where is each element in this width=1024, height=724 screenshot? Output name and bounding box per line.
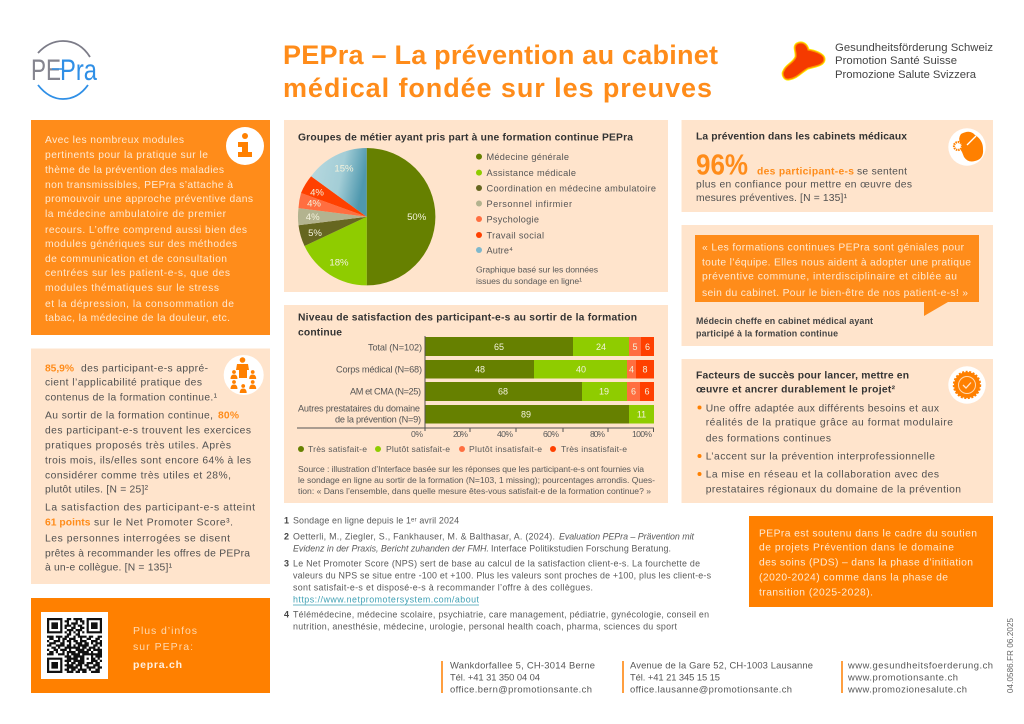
row: Total xyxy=(425,337,654,356)
bar legend: Plutôt satisfait-e xyxy=(386,444,450,454)
bar chart source: le sondage en ligne au sortir de la formation (N=103, 1 missing); pourcentages arrondis. Ques- xyxy=(298,475,655,485)
bar category labels xyxy=(298,342,422,424)
panel: professional groups pie chart xyxy=(284,120,668,292)
quote text: toute l’équipe. Elles nous aident à adopter une pratique xyxy=(702,258,971,268)
bullet list: L’accent sur la prévention interprofessionnelle xyxy=(706,452,935,462)
panel: satisfaction bar chart xyxy=(284,305,668,503)
quote text: préventive commune, interdisciplinaire et ciblée au xyxy=(702,272,957,282)
logo: PEPra xyxy=(31,41,97,99)
pie legend: Travail social xyxy=(486,230,544,240)
address: Bern: office.bern@promotionsante.ch xyxy=(450,684,592,694)
address: Bern: Wankdorfallee 5, CH-3014 Berne xyxy=(450,660,595,670)
intro text: pertinents pour la pratique sur le xyxy=(45,150,208,161)
intro text: centrées sur les patient-e-s, que des xyxy=(45,268,230,279)
bullet list: La mise en réseau et la collaboration avec des xyxy=(706,470,939,480)
panel: success factors xyxy=(682,359,993,503)
key figures text: considérer comme très utiles et 28%, xyxy=(45,470,231,482)
key figures text: trois mois, ils/elles sont encore 64% à les xyxy=(45,456,251,466)
heading: bar chart: Niveau de satisfaction des participant-e-s au sortir de la formation xyxy=(298,312,637,324)
logo: PEPra: PE xyxy=(31,54,61,87)
title: médical fondée sur les preuves xyxy=(283,73,712,103)
document reference: 04.0586.FR 06.2025 xyxy=(1006,617,1015,693)
speech bubble xyxy=(695,235,979,316)
row: Total: 24 xyxy=(596,342,606,352)
funding text: des soins (PDS) – dans la phase d’initiation xyxy=(759,558,973,568)
intro text: la médecine ambulatoire de premier xyxy=(45,209,227,220)
stat description xyxy=(696,166,912,204)
footnotes: 2 xyxy=(284,532,289,542)
stat description: des participant-e-s xyxy=(757,166,854,178)
heading: success factors: Facteurs de succès pour lancer, mettre en xyxy=(696,370,909,382)
row: Autres prestataires xyxy=(425,405,654,424)
logo: Gesundheitsförderung Schweiz: Promozione Salute Svizzera xyxy=(835,69,977,81)
footnotes: sont satisfait-e-s et disposé-e-s à recommander l’offre à des collègues. xyxy=(293,582,593,592)
intro text: thème de la prévention des maladies xyxy=(45,165,224,176)
footnotes: 3 xyxy=(284,558,289,568)
footnotes: https://www.netpromotersystem.com/about xyxy=(293,594,480,604)
bar category labels: AM et CMA (N=25) xyxy=(350,386,421,396)
logo: Gesundheitsförderung Schweiz: Promotion Santé Suisse xyxy=(835,55,957,67)
row: Total: 5 xyxy=(632,342,638,352)
footnotes: Télémédecine, médecine scolaire, psychiatrie, care management, pédiatrie, gynécologie, conseil en xyxy=(293,610,709,620)
key figures text: des participant-e-s appré- xyxy=(81,364,208,374)
pie chart: 4% xyxy=(307,198,321,210)
row: Corps médical: 8 xyxy=(642,364,648,374)
address: Lausanne: Tél. +41 21 345 15 15 xyxy=(630,672,720,682)
footnotes: 4 xyxy=(284,610,289,620)
key figures text: La satisfaction des participant-e-s atteint xyxy=(45,502,255,514)
intro text: de communication et de consultation xyxy=(45,254,227,265)
row: Autres prestataires: 11 xyxy=(637,410,646,420)
panel: testimonial xyxy=(682,225,993,346)
bar axis labels xyxy=(411,429,652,439)
stat: 96%: 96% xyxy=(696,150,748,182)
stacked bar chart xyxy=(297,336,654,432)
bar axis labels: 0% xyxy=(411,429,423,439)
key figures text: Au sortir de la formation continue, xyxy=(45,410,213,422)
row: AM et CMA: 19 xyxy=(599,386,609,396)
stat description: se sentent xyxy=(857,166,907,178)
link text: sur PEPra: xyxy=(133,641,193,653)
intro text: recours. L’offre comprend aussi bien des xyxy=(45,225,247,236)
bar chart source: tion: « Dans l’ensemble, dans quelle mesure êtes-vous satisfait-e de la formation continue? » xyxy=(298,486,651,496)
pie chart source note xyxy=(476,265,598,286)
quote text xyxy=(702,242,971,299)
title: PEPra – La prévention au cabinet xyxy=(283,40,718,70)
row: Corps médical: 40 xyxy=(576,364,586,374)
bar legend: Très insatisfait-e xyxy=(561,444,627,454)
key figures text: à un-e collègue. [N = 135]¹ xyxy=(45,562,173,574)
intro text: modules génériques sur des méthodes xyxy=(45,239,237,250)
key figures text: cient l’applicabilité pratique des xyxy=(45,378,202,388)
key figures text: 61 points xyxy=(45,518,91,528)
heading: bar chart xyxy=(298,312,637,338)
logo: Gesundheitsförderung Schweiz: Gesundheitsförderung Schweiz xyxy=(835,42,993,54)
icon: check badge xyxy=(948,366,986,404)
websites: www.promozionesalute.ch xyxy=(847,684,967,694)
pie chart: 15% xyxy=(334,164,354,174)
panel: key figures xyxy=(31,348,270,584)
bar axis labels: 80% xyxy=(590,429,605,439)
pie legend: Psychologie xyxy=(486,214,539,224)
quote attribution xyxy=(696,316,873,338)
panel: prevention in medical practices xyxy=(682,120,993,212)
bar category labels: de la prévention (N=9) xyxy=(335,414,421,424)
link text: Plus d’infos xyxy=(133,625,197,637)
intro text: tabac, la médecine de la douleur, etc. xyxy=(45,313,230,324)
row: Corps médical: 48 xyxy=(475,364,485,374)
address: Lausanne: office.lausanne@promotionsante.ch xyxy=(630,684,792,694)
footnotes: Interface Politikstudien Forschung Beratung. xyxy=(491,544,671,554)
footnotes: valeurs du NPS se situe entre -100 et +100. Plus les valeurs sont proches de +100, plus les client-e-s xyxy=(293,570,712,580)
footnotes: Le Net Promoter Score (NPS) sert de base au calcul de la satisfaction client-e-s. La fourchette de xyxy=(293,558,700,568)
quote attribution: Médecin cheffe en cabinet médical ayant xyxy=(696,316,873,326)
funding text: de projets Prévention dans le domaine xyxy=(759,542,954,554)
websites: www.gesundheitsfoerderung.ch xyxy=(847,660,993,670)
heading: success factors: œuvre et ancrer durablement le projet² xyxy=(696,384,896,396)
bullet list: des formations continues xyxy=(706,434,831,444)
intro text: Avec les nombreux modules xyxy=(45,135,184,146)
icon: trainer and group xyxy=(224,355,264,395)
pie chart source note: issues du sondage en ligne¹ xyxy=(476,276,582,286)
heading: bar chart: continue xyxy=(298,328,342,338)
funding text: PEPra est soutenu dans le cadre du soutien xyxy=(759,528,977,540)
intro text xyxy=(45,135,253,324)
bar axis labels: 40% xyxy=(497,429,513,439)
row: AM et CMA: 68 xyxy=(498,386,508,396)
key figures text: prêtes à recommander les offres de PEPra xyxy=(45,548,250,560)
intro text: et la dépression, la consommation de xyxy=(45,299,234,310)
key figures text: 80% xyxy=(218,410,239,422)
intro text: modules thématiques sur le stress xyxy=(45,283,219,294)
funding text: (2020-2024) comme dans la phase de xyxy=(759,572,948,584)
funding text xyxy=(759,528,977,598)
footnotes: Evidenz in der Praxis, Bericht zuhanden der FMH. xyxy=(293,544,489,554)
footnotes: nutrition, anesthésie, médecine, urologie, personal health coach, pharma, sciences du sport xyxy=(293,622,678,632)
row: Corps médical xyxy=(425,360,654,378)
bar category labels: Total (N=102) xyxy=(368,342,422,352)
row: AM et CMA: 6 xyxy=(631,386,636,396)
row: Autres prestataires: 89 xyxy=(521,410,531,420)
key figures text: 85,9% xyxy=(45,364,74,374)
pie chart: 4% xyxy=(306,212,320,223)
pie chart: 50% xyxy=(407,212,427,223)
address: Bern xyxy=(441,660,595,694)
key figures text: pratiques proposés très utiles. Après xyxy=(45,440,231,452)
key figures text: sur le Net Promoter Score³. xyxy=(94,518,233,528)
bar category labels: Corps médical (N=68) xyxy=(336,364,422,374)
bar axis labels: 20% xyxy=(453,429,468,439)
bar legend xyxy=(298,444,627,454)
footnotes: Sondage en ligne depuis le 1ᵉʳ avril 2024 xyxy=(293,516,459,526)
pie chart: 5% xyxy=(308,228,322,239)
logo: PEPra: Pra xyxy=(60,54,97,87)
key figures text: Les personnes interrogées se disent xyxy=(45,534,230,544)
heading: prevention: La prévention dans les cabinets médicaux xyxy=(696,132,907,142)
pie chart xyxy=(298,148,435,285)
pie legend: Coordination en médecine ambulatoire xyxy=(486,184,656,194)
bullet list: Une offre adaptée aux différents besoins et aux xyxy=(706,404,940,414)
websites xyxy=(841,660,993,694)
panel: funding xyxy=(749,516,993,607)
link text xyxy=(133,625,197,671)
key figures text: contenus de la formation continue.¹ xyxy=(45,392,218,404)
bar legend: Plutôt insatisfait-e xyxy=(469,444,542,454)
websites: www.promotionsante.ch xyxy=(847,672,958,682)
bullet list: réalités de la pratique grâce au format modulaire xyxy=(706,418,953,428)
icon: head with gear and check xyxy=(948,128,986,166)
key figures text: des participant-e-s trouvent les exercices xyxy=(45,426,251,436)
icon: information xyxy=(226,127,264,165)
stat description: plus en confiance pour mettre en œuvre des xyxy=(696,180,912,190)
key figures text xyxy=(45,364,255,574)
address: Lausanne: Avenue de la Gare 52, CH-1003 Lausanne xyxy=(630,660,813,670)
footnotes: 1 xyxy=(284,516,289,526)
bar legend: Très satisfait-e xyxy=(308,444,367,454)
quote text: sein du cabinet. Pour le bien-être de nos patient-e-s! » xyxy=(702,288,968,299)
panel: introduction xyxy=(31,120,270,335)
stat description: mesures préventives. [N = 135]¹ xyxy=(696,193,848,204)
bar chart source: Source : illustration d’Interface basée sur les réponses que les participant-e-s ont fournies via xyxy=(298,464,644,474)
link text: pepra.ch xyxy=(133,659,182,671)
bar axis labels: 100% xyxy=(632,429,652,439)
pie chart source note: Graphique basé sur les données xyxy=(476,265,598,275)
key figures text: plutôt utiles. [N = 25]² xyxy=(45,484,149,496)
quote text: « Les formations continues PEPra sont géniales pour xyxy=(702,242,965,254)
pie legend: Autre⁴ xyxy=(486,246,513,256)
footnotes: Oetterli, M., Ziegler, S., Fankhauser, M. & Balthasar, A. (2024). xyxy=(293,532,555,542)
heading: pie chart: Groupes de métier ayant pris part à une formation continue PEPra xyxy=(298,132,633,144)
heading: success factors xyxy=(696,370,909,396)
quote attribution: participé à la formation continue xyxy=(696,328,838,338)
footnotes: Evaluation PEPra – Prävention mit xyxy=(559,532,695,542)
bar axis labels: 60% xyxy=(543,429,559,439)
intro text: promouvoir une approche préventive dans xyxy=(45,194,253,205)
pie chart: 4% xyxy=(310,188,324,198)
pie legend: Médecine générale xyxy=(486,152,569,162)
bar chart source xyxy=(298,464,655,496)
row: Total: 6 xyxy=(645,342,650,352)
bar category labels: Autres prestataires du domaine xyxy=(298,404,420,414)
row: Corps médical: 4 xyxy=(629,364,634,374)
title xyxy=(283,40,718,103)
QR code xyxy=(41,612,108,679)
funding text: transition (2025-2028). xyxy=(759,588,873,598)
bullet list xyxy=(698,404,961,496)
bullet list: prestataires régionaux du domaine de la prévention xyxy=(706,484,961,496)
pie legend: Assistance médicale xyxy=(486,168,576,178)
logo: Gesundheitsförderung Schweiz xyxy=(783,42,993,81)
pie chart: 18% xyxy=(329,258,349,268)
intro text: non transmissibles, PEPra s’attache à xyxy=(45,180,233,191)
panel: QR code and link xyxy=(31,598,270,693)
row: Total: 65 xyxy=(494,342,504,352)
pie legend: Personnel infirmier xyxy=(486,199,572,209)
address: Lausanne xyxy=(622,660,813,694)
row: AM et CMA xyxy=(425,382,654,401)
row: AM et CMA: 6 xyxy=(644,386,650,396)
pie legend xyxy=(476,152,656,256)
address: Bern: Tél. +41 31 350 04 04 xyxy=(450,672,540,682)
footnotes xyxy=(284,516,712,632)
